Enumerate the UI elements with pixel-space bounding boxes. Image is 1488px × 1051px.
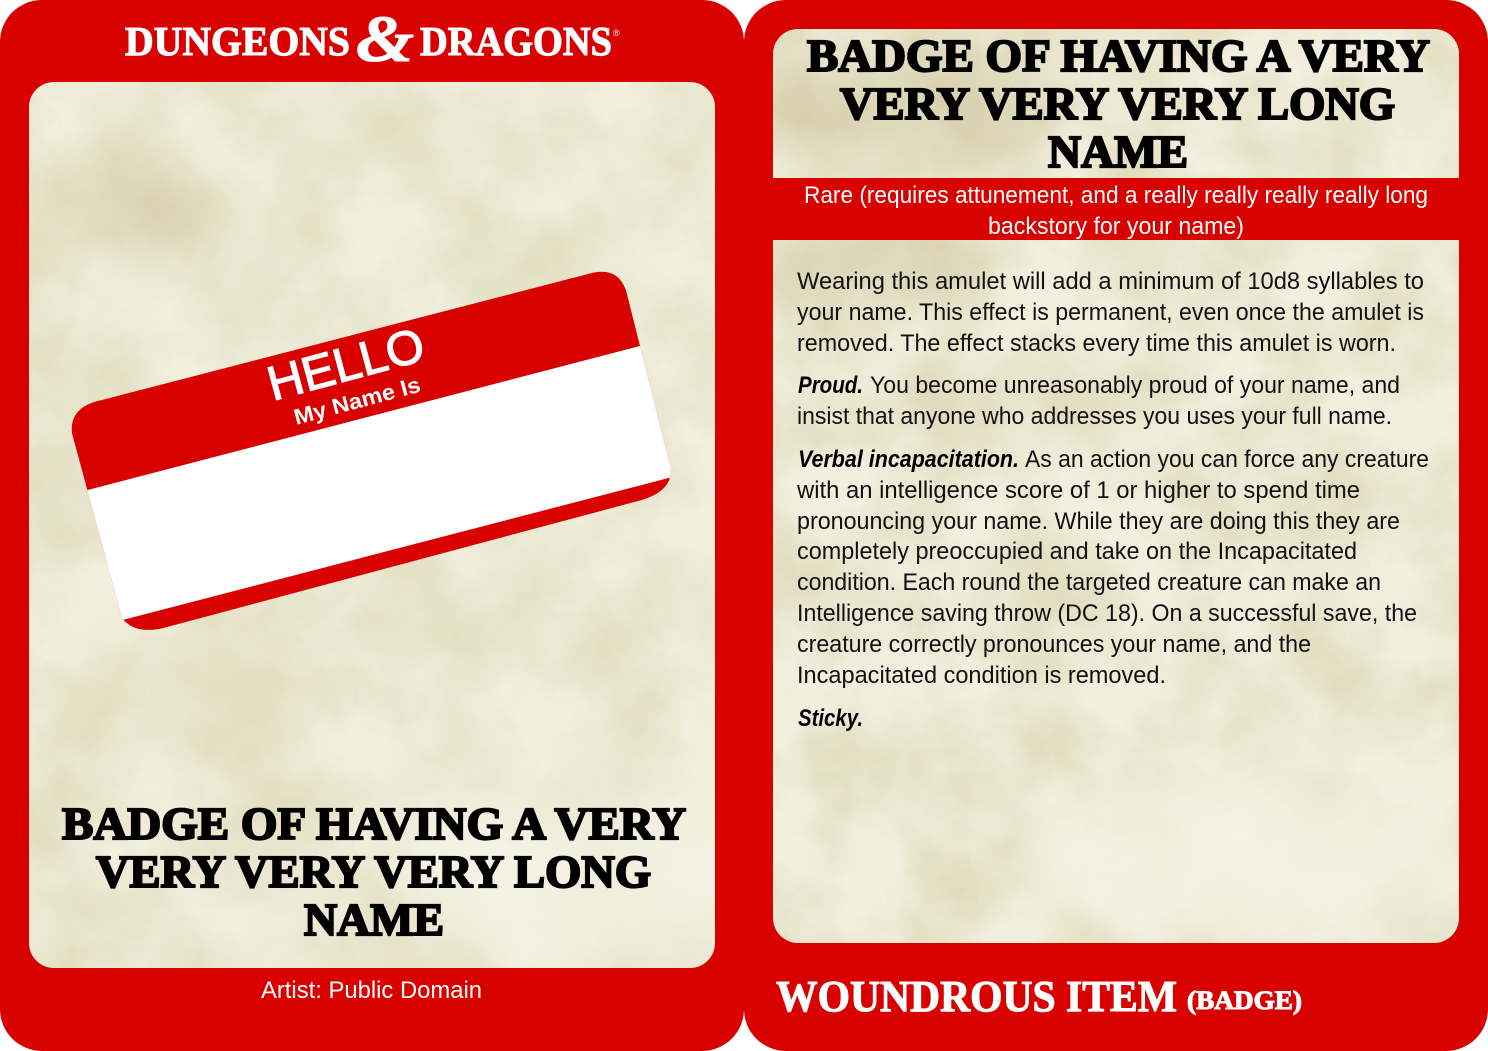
panel: parchment text area (750, 29, 1480, 943)
title: back card item name: VERY VERY VERY LONG (840, 78, 1395, 129)
panel: front card (0, 0, 800, 1051)
text block: Verbal incapacitation: condition. Each round the targeted creature can make an (797, 569, 1381, 596)
logo: Dungeons & Dragons: & (356, 3, 414, 76)
text block: Verbal incapacitation: Intelligence saving throw (DC 18). On a successful save, the (797, 600, 1417, 627)
text block: Proud: You become unreasonably proud of your name, and (870, 372, 1400, 399)
panel: back card (744, 0, 1488, 1051)
title: front card item name (62, 798, 686, 945)
title: front card item name: NAME (304, 894, 444, 945)
icon: hello name badge (60, 260, 685, 640)
text block: Verbal incapacitation: pronouncing your name. While they are doing this they are (797, 508, 1400, 535)
item type footer: (BADGE) (1187, 986, 1302, 1015)
text block: Sticky: Sticky. (798, 705, 863, 732)
logo: Dungeons & Dragons (125, 3, 620, 76)
text block: item description (797, 268, 1424, 357)
title: back card item name (807, 30, 1430, 177)
text block: Verbal incapacitation: with an intelligence score of 1 or higher to spend time (796, 477, 1360, 504)
text block: Verbal incapacitation (796, 446, 1429, 689)
rarity band: backstory for your name) (988, 213, 1244, 240)
text block: Verbal incapacitation: completely preoccupied and take on the Incapacitated (797, 538, 1357, 565)
rarity band (773, 178, 1459, 240)
artist credit: Artist: Public Domain (261, 977, 482, 1004)
logo: Dungeons & Dragons: DRAGONS (420, 18, 612, 64)
panel: parchment art area (29, 82, 715, 968)
text block: item description: Wearing this amulet will add a minimum of 10d8 syllables to (797, 268, 1424, 295)
text block: Verbal incapacitation: creature correctly pronounces your name, and the (797, 631, 1311, 658)
title: back card item name: NAME (1048, 126, 1188, 177)
logo: Dungeons & Dragons: ® (613, 28, 620, 38)
badge heading: HELLO: HELLO (262, 319, 430, 411)
title: front card item name: BADGE OF HAVING A VERY (62, 798, 686, 849)
item type footer: WOUNDROUS ITEM (776, 972, 1177, 1021)
text block: Verbal incapacitation: Verbal incapacitation. (798, 446, 1019, 473)
text block: item description: removed. The effect stacks every time this amulet is worn. (797, 330, 1396, 357)
title: front card item name: VERY VERY VERY LONG (96, 846, 651, 897)
text block: Proud: Proud. (798, 372, 863, 399)
title: back card item name: BADGE OF HAVING A VERY (807, 30, 1430, 81)
logo: Dungeons & Dragons: DUNGEONS (125, 18, 350, 64)
rarity band: Rare (requires attunement, and a really really really really long (804, 182, 1428, 209)
text block: Proud (797, 372, 1400, 430)
text block: Verbal incapacitation: As an action you can force any creature (1025, 446, 1429, 473)
badge subheading: My Name Is: My Name Is (291, 372, 423, 430)
text block: Proud: insist that anyone who addresses you uses your full name. (797, 403, 1392, 430)
text block: item description: your name. This effect is permanent, even once the amulet is (797, 299, 1424, 326)
text block: Verbal incapacitation: Incapacitated condition is removed. (797, 662, 1166, 689)
